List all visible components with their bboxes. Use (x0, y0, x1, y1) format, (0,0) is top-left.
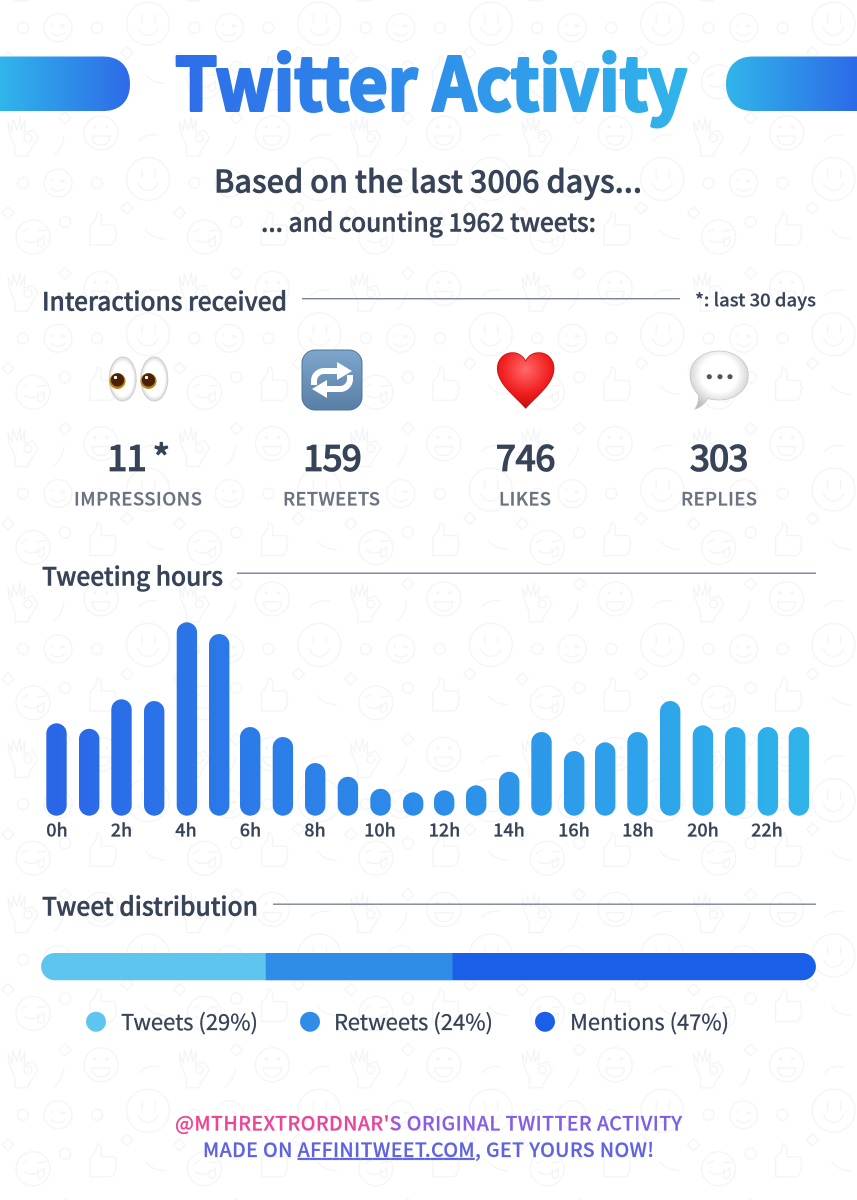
panel: tweeting hours (42, 558, 816, 842)
hour labels: 20h (687, 816, 719, 842)
hour labels: 16h (558, 816, 590, 842)
stat: likes: LIKES (499, 486, 551, 512)
hour labels: 18h (622, 816, 654, 842)
title: Twitter Activity (175, 26, 687, 132)
hour labels: 4h (175, 816, 197, 842)
stat: likes (496, 353, 556, 512)
subtitle: days: Based on the last 3006 days... (214, 156, 642, 202)
stat: retweets: RETWEETS (283, 486, 380, 512)
hour labels: 0h (46, 816, 68, 842)
note: last 30 days: *: last 30 days (695, 286, 816, 312)
footer: credit: MADE ON AFFINITWEET.COM, GET YOURS NOW! (203, 1134, 654, 1163)
bar chart (46, 622, 809, 816)
hour labels: 2h (111, 816, 132, 842)
hour labels (46, 816, 783, 842)
stat: retweets (283, 350, 380, 512)
icon: red heart (497, 353, 554, 408)
icon: repeat arrows (302, 350, 362, 410)
footer: credit (175, 1108, 682, 1163)
hour labels: 12h (429, 816, 460, 842)
hour labels: 8h (304, 816, 326, 842)
hour labels: 10h (364, 816, 396, 842)
stat: impressions: 11 * (107, 430, 170, 482)
stat: retweets: 159 (303, 430, 362, 482)
hour labels: 14h (493, 816, 525, 842)
stat: replies (681, 351, 757, 512)
icon: speech bubble (690, 351, 748, 409)
hour labels: 22h (751, 816, 783, 842)
panel: interactions received (42, 282, 816, 512)
legend: mentions: Mentions (47%) (570, 1005, 729, 1037)
heading: tweet distribution: Tweet distribution (42, 888, 258, 924)
heading: tweeting hours: Tweeting hours (42, 558, 223, 594)
stat: impressions (74, 357, 202, 512)
stat: impressions: IMPRESSIONS (74, 486, 202, 512)
icon: eyes (109, 357, 168, 401)
panel: tweet distribution (41, 888, 816, 1037)
left title bar (0, 56, 130, 111)
stacked bar (41, 953, 816, 980)
stat: replies: 303 (690, 430, 749, 482)
stat: replies: REPLIES (681, 486, 757, 512)
footer: credit: @MTHREXTRORDNAR'S ORIGINAL TWITTER ACTIVITY (175, 1108, 682, 1136)
subtitle: tweets: ... and counting 1962 tweets: (261, 204, 596, 240)
heading: interactions received: Interactions received (42, 282, 287, 318)
legend: tweets: Tweets (29%) (121, 1005, 258, 1037)
stat: likes: 746 (496, 430, 556, 482)
legend: retweets: Retweets (24%) (334, 1005, 493, 1037)
hour labels: 6h (240, 816, 261, 842)
right title bar (726, 56, 857, 111)
